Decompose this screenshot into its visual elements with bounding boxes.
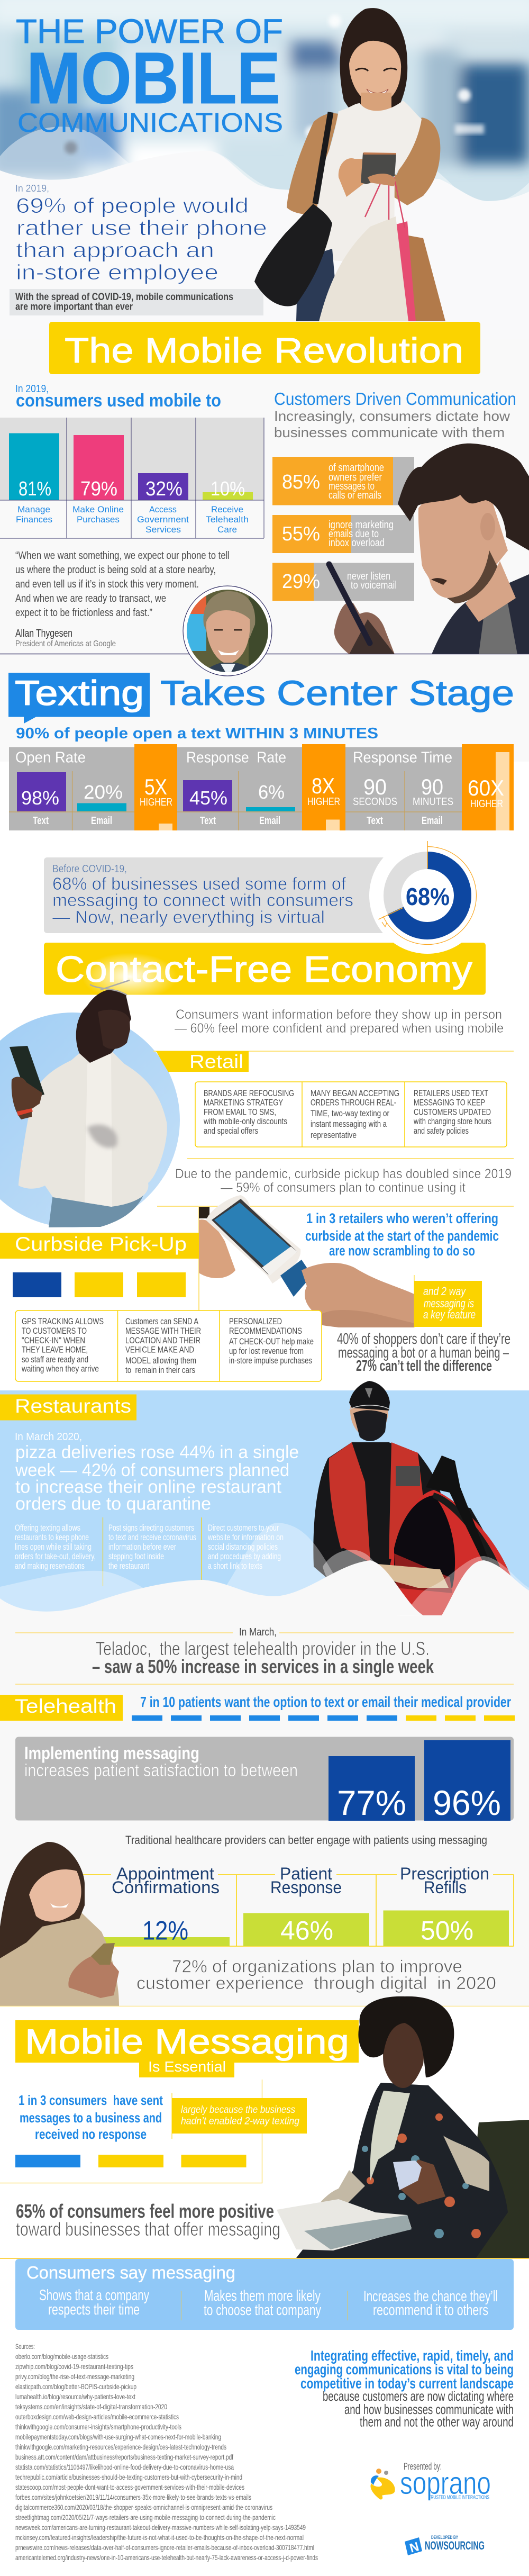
panel: consumers say messaging: Makes them more likely <box>204 2288 321 2304</box>
logo: Soprano: soprano <box>400 2465 491 2501</box>
table: curbside tactics: waiting when they arrive <box>21 1364 99 1374</box>
bars: customer communication preferences: emails due to <box>329 528 379 540</box>
panel: consumers say messaging <box>15 2259 514 2330</box>
photo: woman with phone in blue circle <box>0 980 180 1227</box>
donut chart: 68 percent <box>379 841 476 944</box>
table: curbside tactics: THEY LEAVE HOME, <box>22 1345 88 1355</box>
table: patient engagement results: Refills <box>424 1878 467 1897</box>
bar chart: consumer mobile uses: Purchases <box>77 514 120 525</box>
photo: woman shopping with phone <box>254 8 445 321</box>
callout: two way messaging: and 2 way <box>423 1285 467 1298</box>
bar chart: consumer mobile uses: Access <box>149 504 177 514</box>
quote <box>15 550 230 648</box>
panel: before COVID-19 statistic: messaging to connect with consumers <box>52 890 353 910</box>
text columns: restaurant tips: orders for take-out, delivery, <box>15 1551 96 1561</box>
sources list: privy.com/blog/the-rise-of-text-message-marketing <box>15 2372 134 2381</box>
table: curbside tactics: in-store impulse purchases <box>229 1355 312 1366</box>
table: curbside tactics: LOCATION AND THEIR <box>125 1335 200 1345</box>
table: retail tactics: MESSAGING TO KEEP <box>414 1098 485 1107</box>
callout: retailers scrambling: are now scrambling to do so <box>329 1243 475 1259</box>
callout: two way messaging: a key feature <box>423 1308 476 1321</box>
text columns: restaurant tips: Offering texting allows <box>15 1523 80 1533</box>
table: curbside tactics: up for lost revenue from <box>229 1346 304 1356</box>
table: curbside tactics: VEHICLE MAKE AND <box>125 1345 194 1355</box>
panel: text vs email comparison: 45% <box>189 787 227 809</box>
sources list: statista.com/statistics/1106497/likelihood-online-food-delivery-due-to-coronavirus-home-usa <box>15 2463 234 2471</box>
panel: text vs email comparison: 6% <box>258 781 285 803</box>
quote: “When we want something, we expect our phone to tell <box>15 550 230 562</box>
heading tag: Restaurants: Restaurants <box>15 1395 131 1417</box>
text: curbside pickup doubled <box>175 1167 512 1195</box>
panel: before COVID-19 statistic: — Now, nearly everything is virtual <box>52 907 325 927</box>
logo: NowSourcing <box>405 2535 485 2556</box>
table: curbside tactics: to remain in their cars <box>125 1365 195 1375</box>
panel: implementing messaging <box>15 1737 514 1822</box>
text columns: restaurant tips: social distancing policies <box>208 1542 278 1552</box>
sources list: newsweek.com/americans-are-turning-restaurant-takeout-delivery-massive-numbers-while-self-isolating-yelp-says-1493549 <box>15 2523 306 2532</box>
icon row: one in three squares <box>13 1272 186 1297</box>
table: retail tactics: CUSTOMERS UPDATED <box>414 1107 491 1117</box>
table: curbside tactics: AT CHECK-OUT help make <box>229 1336 314 1346</box>
bar chart: consumer mobile uses: 32% <box>145 478 183 500</box>
hero wave shape <box>0 126 529 339</box>
bars: customer communication preferences: inbox overload <box>329 537 385 549</box>
text: pizza deliveries statistic: pizza deliveries rose 44% in a single <box>15 1442 299 1462</box>
logo: NowSourcing: NOWSOURCING <box>425 2539 485 2552</box>
covid callout band: With the spread of COVID-19, mobile communications <box>15 292 233 303</box>
panel: before COVID-19 statistic: 68% of businesses used some form of <box>52 874 346 893</box>
intro statistic text: 69% of people would <box>16 194 249 218</box>
text columns: restaurant tips: information before ever <box>108 1542 176 1552</box>
title <box>16 12 283 138</box>
heading tag: Curbside Pick-Up <box>0 1233 199 1259</box>
panel: text vs email comparison: Text <box>33 815 49 827</box>
text columns: restaurant tips: stepping foot inside <box>108 1551 164 1561</box>
panel: text vs email comparison: MINUTES <box>413 796 453 808</box>
panel: implementing messaging: 77% <box>337 1783 406 1822</box>
heading tag: Telehealth: Telehealth <box>15 1695 116 1717</box>
sources list: techrepublic.com/article/businesses-should-be-texting-customers-but-with-cybersecurity-in-mind <box>15 2473 242 2481</box>
text columns: restaurant tips: Post signs directing customers <box>108 1523 194 1533</box>
section banner: Mobile Messaging Is Essential <box>15 2020 359 2077</box>
panel: text vs email comparison: Response Rate <box>186 749 286 766</box>
table: retail tactics: RETAILERS USED TEXT <box>414 1088 488 1098</box>
text columns: restaurant tips: the restaurant <box>108 1561 149 1571</box>
panel: text vs email comparison: HIGHER <box>307 796 340 808</box>
quote: Allan Thygesen <box>15 628 72 639</box>
callout: two way messaging: messaging is <box>424 1297 474 1310</box>
covid callout band <box>10 289 263 315</box>
sources list: prnewswire.com/news-releases/data-over-half-of-consumers-ignore-retailer-emails-because-of-inbox-overload-300718477.html <box>15 2543 314 2552</box>
text: organizations plan to improve: 72% of organizations plan to improve <box>172 1956 462 1976</box>
panel: text vs email comparison: 8X <box>312 773 335 798</box>
sources list: mobilepaymentstoday.com/blogs/with-use-surging-what-comes-next-for-mobile-banking <box>15 2433 221 2441</box>
text columns: restaurant tips <box>15 1523 284 1571</box>
panel: restaurants <box>0 1381 529 1616</box>
covid callout band: are more important than ever <box>15 302 133 312</box>
heading tag: Telehealth <box>0 1695 123 1721</box>
sources list: Sources: <box>15 2342 35 2351</box>
text: consumers want information <box>175 1007 504 1036</box>
bars: customer communication preferences: ignore marketing <box>329 519 394 531</box>
bar chart: consumer mobile uses: Care <box>217 525 237 535</box>
bar chart: consumer mobile uses: 79% <box>80 478 117 500</box>
table: retail tactics: instant messaging with a <box>311 1119 387 1129</box>
table: curbside tactics: MODEL allowing them <box>125 1355 196 1366</box>
text: pizza deliveries statistic: In March 2020, <box>15 1431 82 1443</box>
sources list: business.att.com/content/dam/attbusiness/reports/business-texting-market-survey-report.pdf <box>15 2453 233 2461</box>
sources list: americantelemed.org/industry-news/one-in-10-americans-use-telehealth-but-nearly-75-lack-awareness-or-access-j-d-power-finds <box>15 2553 318 2562</box>
table: patient engagement results: 46% <box>280 1916 333 1946</box>
photo: woman with long hair texting <box>0 1842 119 2006</box>
sources list: elasticpath.com/blog/better-BOPIS-curbside-pickup <box>15 2382 136 2391</box>
table: patient engagement results: Prescription <box>400 1864 489 1883</box>
pictogram: 7 in 10 patients <box>132 1694 515 1721</box>
panel: text vs email comparison: 98% <box>21 787 59 809</box>
logo: Soprano: TRUSTED MOBILE INTERACTIONS <box>428 2495 489 2500</box>
heading: consumers used mobile to: consumers used mobile to <box>16 391 221 411</box>
table: retail tactics <box>195 1082 507 1147</box>
bars: customer communication preferences: 55% <box>282 523 320 545</box>
decorative wave at bottom of restaurants panel <box>0 1523 529 1616</box>
sources list: lumahealth.io/blog/resource/why-patients-love-text <box>15 2392 135 2401</box>
logo: NowSourcing: N <box>408 2539 421 2556</box>
text: consumers want information: Consumers want information before they show up in person <box>176 1007 502 1022</box>
text: 65 percent feel more positive <box>16 2200 280 2240</box>
table: curbside tactics: "CHECK-IN" WHEN <box>22 1335 85 1345</box>
panel: text vs email comparison: Open Rate <box>15 749 86 766</box>
bars: customer communication preferences: to voicemail <box>351 580 397 591</box>
intro statistic text <box>15 183 267 284</box>
bars: customer communication preferences: 85% <box>282 471 320 493</box>
hero background: blurred shopping mall <box>0 0 529 212</box>
section banner: Mobile Messaging Is Essential: Is Essential <box>148 2058 226 2075</box>
section banner: Contact-Free Economy <box>44 837 486 1000</box>
bar chart: consumer mobile uses: Manage <box>17 504 50 514</box>
quote: expect it to be frictionless and fast.” <box>15 607 152 619</box>
table: retail tactics: TIME, two-way texting or <box>311 1108 389 1118</box>
table: curbside tactics: GPS TRACKING ALLOWS <box>22 1316 104 1326</box>
heading tag: Restaurants <box>0 1394 136 1421</box>
text columns: restaurant tips: Direct customers to your <box>208 1523 279 1533</box>
heading tag: Retail <box>153 1051 514 1072</box>
bars: customer communication preferences: 29% <box>282 571 320 593</box>
callout: 2-way texting: largely because the business <box>181 2104 295 2116</box>
bar chart: consumer mobile uses: Government <box>137 514 189 525</box>
heading: customers driven communication <box>274 389 516 440</box>
photo: man looking at phone <box>329 444 529 654</box>
panel: before COVID-19 statistic: Before COVID-19, <box>52 863 127 875</box>
text columns: restaurant tips: restaurants to keep phone <box>15 1532 89 1542</box>
panel: consumers say messaging: Shows that a company <box>39 2287 149 2304</box>
panel: text vs email comparison: Email <box>422 815 443 827</box>
table: patient engagement results: Response <box>270 1878 342 1897</box>
table: retail tactics: with changing store hours <box>413 1116 491 1126</box>
section banner: Contact-Free Economy: Contact-Free Economy <box>56 948 472 990</box>
sources list: streetfightmag.com/2020/05/21/7-ways-retailers-are-using-mobile-messaging-to-connect-during-the-pandemic <box>15 2513 276 2521</box>
quote: President of Americas at Google <box>15 639 116 648</box>
sources list: thinkwithgoogle.com/consumer-insights/smartphone-productivity-tools <box>15 2423 181 2431</box>
table: retail tactics: and special offers <box>204 1126 258 1136</box>
photo: hands with card reader <box>199 1195 414 1327</box>
panel: consumers say messaging: Consumers say messaging <box>26 2263 235 2282</box>
panel: text vs email comparison: HIGHER <box>470 798 503 810</box>
title: MOBILE <box>26 38 280 119</box>
text columns: restaurant tips: a short link to texts <box>208 1561 262 1571</box>
photo: delivery man with bag <box>313 1381 513 1615</box>
bar chart: consumer mobile uses <box>0 418 264 538</box>
table: curbside tactics: so staff are ready and <box>22 1354 88 1364</box>
logo: Soprano <box>370 2461 491 2501</box>
heading: customers driven communication: Increasingly, consumers dictate how <box>274 408 510 424</box>
callout: 2-way texting <box>172 2093 307 2139</box>
heading: Texting Takes Center Stage: Texting <box>15 673 144 712</box>
callout: retailers scrambling <box>305 1210 499 1259</box>
callout: two way messaging <box>414 1275 482 1327</box>
text: one in three consumers <box>19 2092 163 2142</box>
table: patient engagement results <box>83 1864 514 1946</box>
heading: consumers used mobile to: In 2019, <box>15 383 49 395</box>
text: pizza deliveries statistic: orders due to quarantine <box>15 1494 211 1514</box>
panel: text vs email comparison: Response Time <box>353 749 452 766</box>
panel: text vs email comparison: 5X <box>144 774 167 799</box>
heading: customers driven communication: businesses communicate with them <box>274 424 505 440</box>
quote: and even tell us if it’s in stock this very moment. <box>15 579 199 590</box>
bar chart: consumer mobile uses: Make Online <box>72 504 124 514</box>
text columns: restaurant tips: lines open while still taking <box>15 1542 92 1552</box>
panel: implementing messaging: increases patient satisfaction to between <box>24 1760 298 1780</box>
text: Teladoc statistic <box>15 1626 514 1684</box>
text: pizza deliveries statistic: week — 42% of consumers planned <box>15 1460 289 1480</box>
text: pizza deliveries statistic <box>15 1431 299 1514</box>
text columns: restaurant tips: and making reservations <box>15 1561 85 1571</box>
title: THE POWER OF <box>16 12 283 50</box>
table: curbside tactics: Customers can SEND A <box>125 1316 198 1326</box>
panel: text vs email comparison: Email <box>91 815 112 827</box>
sources list: digitalcommerce360.com/2020/03/18/the-shopper-speaks-omnichannel-is-omnipresent-amid-the-coronavirus <box>15 2503 272 2511</box>
heading: Texting Takes Center Stage <box>8 673 514 724</box>
text: pizza deliveries statistic: to increase their online restaurant <box>15 1477 282 1497</box>
intro statistic text: rather use their phone <box>16 216 267 240</box>
panel: implementing messaging: 96% <box>433 1783 501 1822</box>
bars: customer communication preferences: owners prefer <box>329 472 382 483</box>
table: retail tactics: BRANDS ARE REFOCUSING <box>204 1088 294 1098</box>
table: retail tactics: MANY BEGAN ACCEPTING <box>311 1088 399 1098</box>
table: retail tactics: ORDERS THROUGH REAL- <box>311 1098 396 1107</box>
table: retail tactics: representative <box>311 1130 357 1140</box>
bars: customer communication preferences: never listen <box>347 571 390 582</box>
sources list: statescoop.com/most-people-dont-want-to-access-government-services-with-their-mobile-devices <box>15 2483 244 2491</box>
pictogram: one in three bars <box>15 2155 247 2167</box>
conclusion text <box>295 2347 514 2429</box>
panel: text vs email comparison: Email <box>259 815 280 827</box>
text: curbside pickup doubled: Due to the pandemic, curbside pickup has doubled since 2019 <box>175 1167 512 1181</box>
text: organizations plan to improve: customer experience through digital in 2020 <box>136 1973 496 1993</box>
logo: NowSourcing: DEVELOPED BY <box>431 2535 458 2540</box>
text: Teladoc statistic: – saw a 50% increase in services in a single week <box>92 1656 434 1677</box>
bar chart: consumer mobile uses: Services <box>145 525 181 535</box>
sources list: forbes.com/sites/johnkoetsier/2019/11/14/consumers-35x-more-likely-to-see-brands-texts-vs-emails <box>15 2493 251 2501</box>
text: one in three consumers: 1 in 3 consumers have sent <box>19 2092 163 2108</box>
bars: customer communication preferences: messages to <box>329 481 375 492</box>
heading tag: Curbside Pick-Up: Curbside Pick-Up <box>15 1233 187 1255</box>
panel: consumers say messaging: to choose that company <box>204 2302 321 2319</box>
callout: 2-way texting: hadn’t enabled 2-way texting <box>181 2116 299 2127</box>
table: retail tactics: MARKETING STRATEGY <box>204 1098 283 1107</box>
table: retail tactics: FROM EMAIL TO SMS, <box>204 1107 276 1117</box>
table: patient engagement results: Appointment <box>116 1864 214 1883</box>
sources list: zipwhip.com/blog/covid-19-restaurant-texting-tips <box>15 2362 133 2371</box>
bars: customer communication preferences <box>272 457 414 601</box>
sources list: mckinsey.com/featured-insights/leadership/the-future-is-not-what-it-used-to-be-thoughts-on-the-shape-of-the-next-normal <box>15 2533 304 2542</box>
portrait: Allan Thygesen <box>183 586 272 677</box>
panel: text vs email comparison: 90 <box>421 774 443 799</box>
intro statistic text: than approach an <box>16 239 214 262</box>
table: curbside tactics: TO CUSTOMERS TO <box>22 1326 87 1336</box>
bar chart: consumer mobile uses: Finances <box>16 514 52 525</box>
panel: text vs email comparison: 20% <box>84 781 123 803</box>
quote: us where the product is being sold at a store nearby, <box>15 564 216 576</box>
quote: And when we are ready to transact, we <box>15 593 166 604</box>
text: Teladoc statistic: Teladoc, the largest telehealth provider in the U.S. <box>96 1638 430 1659</box>
sources list <box>15 2342 318 2562</box>
text: one in three consumers: messages to a business and <box>20 2110 162 2126</box>
panel: before COVID-19 statistic <box>44 857 414 933</box>
table: patient engagement results: Confirmations <box>112 1878 220 1897</box>
bar chart: consumer mobile uses: 81% <box>19 478 51 500</box>
table: retail tactics: with mobile-only discounts <box>203 1116 287 1126</box>
table: patient engagement results: 12% <box>142 1916 188 1946</box>
sources list: teksystems.com/en/insights/state-of-digital-transformation-2020 <box>15 2402 167 2411</box>
table: patient engagement results: Patient <box>280 1864 332 1883</box>
title: COMMUNICATIONS <box>17 107 283 138</box>
text: shoppers bot or human <box>337 1331 510 1375</box>
logo: Soprano: Presented by: <box>404 2461 442 2472</box>
text columns: restaurant tips: website for information on <box>207 1532 284 1542</box>
table: retail tactics: and safety policies <box>414 1126 469 1136</box>
panel: implementing messaging: Implementing messaging <box>24 1743 199 1763</box>
table: patient engagement results: 50% <box>421 1916 473 1946</box>
sources list: oberlo.com/blog/mobile-usage-statistics <box>15 2352 108 2361</box>
heading tag: Retail: Retail <box>189 1051 243 1072</box>
section banner: The Mobile Revolution <box>49 322 480 374</box>
panel: text vs email comparison: SECONDS <box>353 796 397 808</box>
text: Teladoc statistic: In March, <box>239 1626 277 1638</box>
bar chart: consumer mobile uses: Telehealth <box>206 514 249 525</box>
intro statistic text: In 2019, <box>15 183 49 194</box>
section banner: Mobile Messaging Is Essential: Mobile Messaging <box>25 2022 349 2061</box>
heading: Texting Takes Center Stage: Takes Center Stage <box>160 673 514 712</box>
text: organizations plan to improve <box>136 1956 496 1993</box>
text: curbside pickup doubled: — 59% of consumers plan to continue using it <box>221 1180 466 1195</box>
text: 65 percent feel more positive: 65% of consumers feel more positive <box>16 2200 274 2222</box>
table: curbside tactics: RECOMMENDATIONS <box>229 1326 302 1336</box>
text columns: restaurant tips: and procedures by adding <box>208 1551 281 1561</box>
text: 65 percent feel more positive: toward businesses that offer messaging <box>16 2218 280 2240</box>
table: curbside tactics: PERSONALIZED <box>229 1316 282 1326</box>
subheading: 90 percent of texts: 90% of people open a text WITHIN 3 MINUTES <box>16 725 378 742</box>
sources list: thinkwithgoogle.com/marketing-resources/experience-design/ces-latest-technology-trends <box>15 2443 226 2451</box>
heading: consumers used mobile to <box>15 383 221 411</box>
text columns: restaurant tips: to text and receive coronavirus <box>108 1532 196 1542</box>
photo: woman with afro reading and phone <box>277 1996 529 2258</box>
bar chart: consumer mobile uses: Receive <box>211 504 243 514</box>
intro statistic text: in-store employee <box>16 261 218 284</box>
table: curbside tactics <box>15 1310 322 1381</box>
sources list: outerboxdesign.com/web-design-articles/mobile-ecommerce-statistics <box>15 2412 179 2421</box>
text: consumers want information: — 60% feel more confident and prepared when using mobile <box>175 1021 504 1036</box>
section banner: The Mobile Revolution: The Mobile Revolution <box>65 331 463 370</box>
panel: consumers say messaging: respects their time <box>48 2301 140 2318</box>
panel: consumers say messaging: recommend it to others <box>373 2302 488 2319</box>
panel: text vs email comparison: 90 <box>363 774 387 799</box>
donut chart: 68 percent: 68% <box>406 883 450 910</box>
bar chart: consumer mobile uses: 10% <box>211 478 245 500</box>
bars: customer communication preferences: of smartphone <box>329 462 384 474</box>
panel: text vs email comparison <box>9 744 514 830</box>
panel: text vs email comparison: Text <box>200 815 216 827</box>
panel: text vs email comparison: HIGHER <box>140 797 172 808</box>
panel: text vs email comparison: 60X <box>468 775 504 800</box>
panel: text vs email comparison: Text <box>367 815 383 827</box>
text: one in three consumers: received no response <box>35 2126 147 2142</box>
table: curbside tactics: MESSAGE WITH THEIR <box>125 1326 201 1336</box>
bars: customer communication preferences: calls or emails <box>329 490 381 501</box>
